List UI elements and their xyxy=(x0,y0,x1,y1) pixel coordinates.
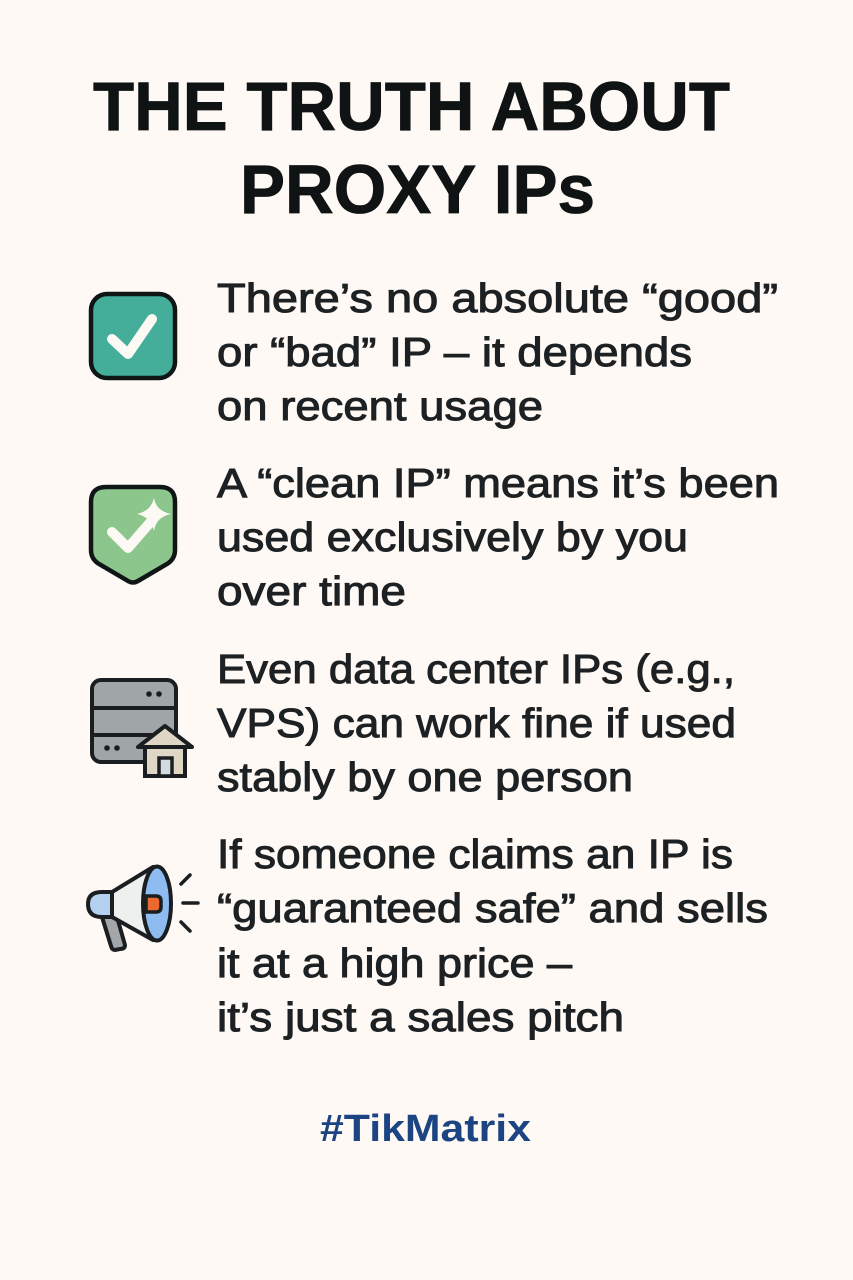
text block: clean IP meaning: over time xyxy=(217,568,406,614)
text block: data center IPs: Even data center IPs (e.g., xyxy=(217,646,735,692)
text block: sales pitch warning: it at a high price – xyxy=(217,940,572,986)
title: THE TRUTH ABOUT xyxy=(93,68,730,145)
title xyxy=(93,68,730,228)
title: PROXY IPs xyxy=(240,151,595,228)
text block: clean IP meaning: A “clean IP” means it’s been xyxy=(217,460,779,506)
text block: clean IP meaning: used exclusively by you xyxy=(217,514,688,560)
text block: no absolute good or bad IP: There’s no absolute “good” xyxy=(217,275,778,321)
text block: data center IPs xyxy=(217,646,736,800)
icon: megaphone xyxy=(88,866,198,950)
hashtag: #TikMatrix xyxy=(320,1108,531,1150)
icon: green shield with check and sparkle xyxy=(91,487,175,582)
text block: sales pitch warning: it’s just a sales pitch xyxy=(217,994,624,1040)
text block: sales pitch warning xyxy=(217,831,768,1040)
text block: no absolute good or bad IP: or “bad” IP – it depends xyxy=(217,329,692,375)
icon: teal check box xyxy=(91,294,175,378)
text block: no absolute good or bad IP: on recent usage xyxy=(217,383,543,429)
text block: data center IPs: VPS) can work fine if used xyxy=(217,700,736,746)
text block: sales pitch warning: If someone claims an IP is xyxy=(217,831,733,877)
text block: clean IP meaning xyxy=(217,460,779,614)
text block: no absolute good or bad IP xyxy=(217,275,778,429)
text block: sales pitch warning: “guaranteed safe” and sells xyxy=(217,885,768,931)
icon: server with house xyxy=(92,680,192,776)
text block: data center IPs: stably by one person xyxy=(217,754,633,800)
